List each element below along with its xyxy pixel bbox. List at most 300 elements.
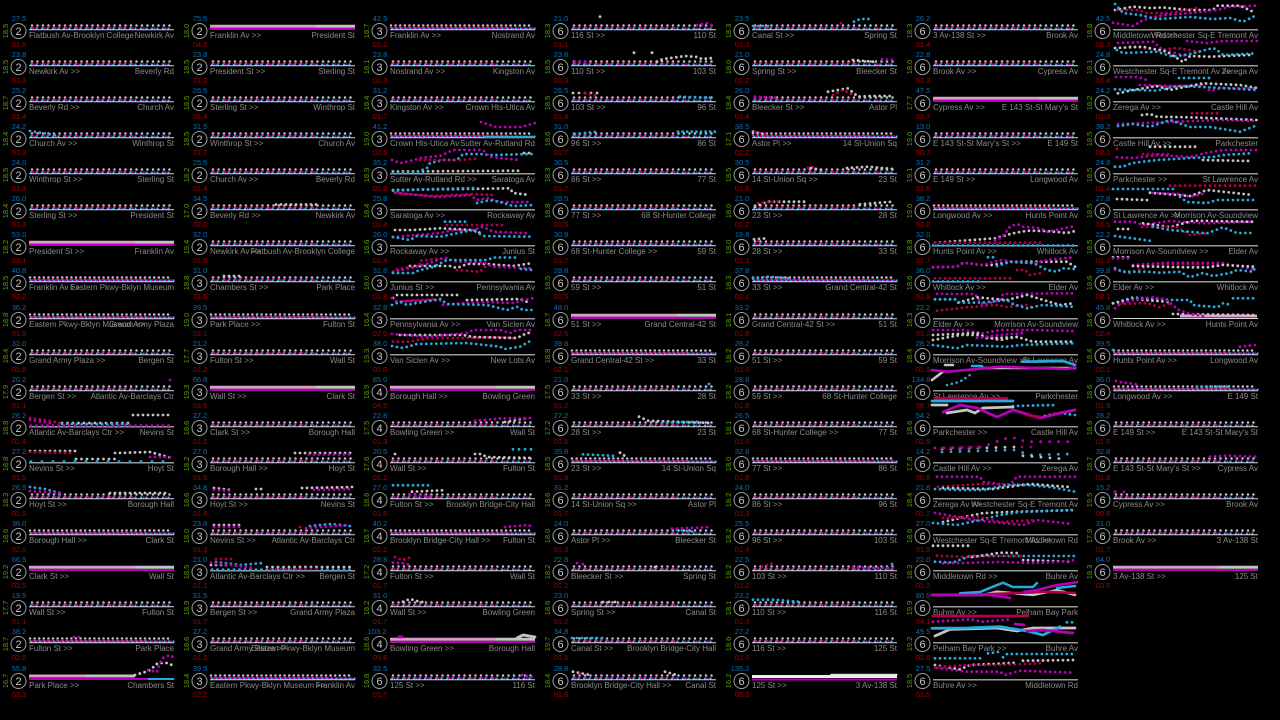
run-time dots [571, 93, 716, 102]
panel: Brooklyn Bridge-City Hall to Canal St: 01.6 [554, 690, 568, 699]
panel: Middletown Rd to Buhre Av: 18.3 [905, 565, 914, 579]
panel: Saratoga Av to Rockaway Av: 18.4 [362, 204, 371, 218]
panel: Junius St to Pennsylvania Av: Junius St >> [390, 283, 435, 292]
panel: Flatbush Av-Brooklyn College to Newkirk Av: 01.5 [12, 40, 26, 49]
panel: 68 St-Hunter College to 77 St: 01.5 [735, 437, 749, 446]
panel: 86 St to 96 St: 18.2 [724, 493, 733, 507]
panel: St Lawrence Av to Morrison Av-Soundview: Morrison Av-Soundview [1174, 211, 1258, 220]
panel: Park Place to Fulton St: Fulton St [323, 320, 356, 329]
panel: 77 St to 86 St: 86 St [878, 464, 898, 473]
panel: Bowling Green to Wall St: Wall St [510, 428, 536, 437]
run-time dots [933, 438, 1078, 463]
run-time dots [571, 494, 716, 499]
panel: 96 St to 86 St: 31.0 [554, 122, 568, 131]
run-time dots [390, 122, 535, 138]
panel: Sterling St to Winthrop St: 26.5 [193, 86, 207, 95]
panel: Brooklyn Bridge-City Hall to Fulton St: Fulton St [503, 536, 536, 545]
panel: Newkirk Av to Beverly Rd: 2 [15, 62, 22, 74]
panel: Church Av to Beverly Rd: 01.4 [193, 184, 207, 193]
panel: 59 St to 68 St-Hunter College: 59 St >> [752, 392, 783, 401]
panel: 33 St to 28 St [543, 375, 717, 410]
run-time dots [752, 422, 897, 427]
panel: Longwood Av to Hunts Point Av: Longwood Av >> [933, 211, 993, 220]
panel: Sterling St to Winthrop St: Sterling St >> [210, 103, 259, 112]
panel: Borough Hall to Bowling Green: Borough Hall >> [390, 392, 448, 401]
panel: Newkirk Av to Flatbush Av-Brooklyn College: Newkirk Av >> [210, 247, 261, 256]
panel: 23 St to 28 St: 01.2 [735, 220, 749, 229]
panel: Middletown Rd to Buhre Av [905, 546, 1078, 590]
panel: Eastern Pkwy-Bklyn Museum to Grand Army Plaza [1, 303, 175, 338]
panel: Franklin Av to Eastern Pkwy-Bklyn Museum: 2 [15, 278, 22, 290]
panel: Beverly Rd to Church Av: 18.7 [1, 96, 10, 110]
panel: Junius St to Pennsylvania Av: 3 [376, 278, 383, 290]
run-time dots [210, 62, 355, 66]
panel: 3 Av-138 St to 125 St: 03.5 [1096, 581, 1110, 590]
panel: Newkirk Av to Flatbush Av-Brooklyn College [182, 230, 356, 265]
panel: Beverly Rd to Newkirk Av: Beverly Rd >> [210, 211, 261, 220]
panel: Church Av to Winthrop St [1, 122, 175, 157]
panel: Zerega Av to Castle Hill Av [1085, 77, 1258, 121]
panel: 103 St to 110 St: 01.2 [735, 581, 749, 590]
run-time dots [1113, 186, 1258, 210]
panel: Wall St to Fulton St: 20.5 [373, 447, 387, 456]
panel: Elder Av to Morrison Av-Soundview: Morrison Av-Soundview [994, 320, 1078, 329]
panel: Saratoga Av to Rockaway Av: 25.8 [373, 194, 387, 203]
panel: E 143 St-St Mary's St to E 149 St: E 143 St-St Mary's St >> [933, 139, 1021, 148]
panel: Canal St to Brooklyn Bridge-City Hall: Canal St >> [571, 644, 614, 653]
panel: Park Place to Chambers St [1, 655, 175, 699]
panel: 86 St to 77 St: 30.5 [554, 158, 568, 167]
panel: 96 St to 86 St: 6 [557, 134, 564, 146]
panel: Astor Pl to Bleecker St: Bleecker St [675, 536, 717, 545]
panel: Longwood Av to Hunts Point Av: 02.0 [916, 220, 930, 229]
panel: Bergen St to Grand Army Plaza: 18.9 [182, 601, 191, 615]
panel: Borough Hall to Hoyt St: Hoyt St [329, 464, 356, 473]
run-time dots [933, 206, 1078, 210]
panel: Canal St to Brooklyn Bridge-City Hall: 34.8 [554, 627, 568, 636]
panel: Brook Av to 3 Av-138 St: 31.0 [1096, 519, 1110, 528]
panel: Pelham Bay Park to Buhre Av: 49.5 [916, 627, 930, 636]
panel: 23 St to 28 St: 28 St [878, 211, 898, 220]
panel: Church Av to Winthrop St: 24.2 [12, 122, 26, 131]
panel: 77 St to 86 St: 32.8 [735, 447, 749, 456]
panel: 14 St-Union Sq to 23 St: 18.5 [724, 168, 733, 182]
panel: Spring St to Canal St [543, 591, 717, 626]
panel: Winthrop St to Sterling St: 18.5 [1, 168, 10, 182]
panel: Hunts Point Av to Whitlock Av: Hunts Point Av >> [933, 247, 997, 256]
panel: Nevins St to Hoyt St [1, 447, 175, 482]
run-time dots [29, 278, 174, 282]
panel: Zerega Av to Westchester Sq-E Tremont Av: 6 [919, 495, 926, 507]
panel: Morrison Av-Soundview to Elder Av [1085, 221, 1258, 265]
panel: Grand Army Plaza to Eastern Pkwy-Bklyn Museum [182, 627, 355, 662]
panel: Grand Army Plaza to Bergen St: 01.8 [12, 365, 26, 374]
panel: 96 St to 103 St: 103 St [874, 536, 898, 545]
panel: Church Av to Beverly Rd: 25.5 [193, 158, 207, 167]
run-time dots [752, 494, 897, 499]
panel: Astor Pl to 14 St-Union Sq: 38.5 [735, 122, 749, 131]
run-time dots [571, 132, 716, 138]
panel: Atlantic Av-Barclays Ctr to Bergen St: Bergen St [319, 572, 356, 581]
panel: Flatbush Av-Brooklyn College to Newkirk Av: 27.5 [12, 14, 26, 23]
run-time dots [210, 387, 355, 390]
panel: Crown Hts-Utica Av to Sutter Av-Rutland Rd: 02.5 [373, 148, 387, 157]
panel: Whitlock Av to Hunts Point Av: 18.6 [1085, 313, 1094, 327]
panel: Pelham Bay Park to Buhre Av: Buhre Av [1046, 644, 1078, 653]
panel: Hoyt St to Nevins St: 34.8 [193, 483, 207, 492]
panel: Atlantic Av-Barclays Ctr to Bergen St: 21.0 [193, 555, 207, 564]
panel: Rockaway Av to Junius St: 01.4 [373, 256, 387, 265]
panel: Longwood Av to E 149 St: E 149 St [1227, 392, 1259, 401]
panel: Whitlock Av to Elder Av: 18.6 [905, 276, 914, 290]
panel: Longwood Av to E 149 St: Longwood Av >> [1113, 392, 1173, 401]
panel: Elder Av to Morrison Av-Soundview [905, 293, 1078, 338]
panel: Eastern Pkwy-Bklyn Museum to Franklin Av [182, 664, 355, 699]
panel: Zerega Av to Castle Hill Av: 18.2 [1085, 96, 1094, 110]
panel: 59 St to 51 St: 51 St [697, 283, 717, 292]
panel: Fulton St to Wall St: 17.7 [182, 349, 191, 363]
panel: Astor Pl to 14 St-Union Sq [724, 122, 897, 157]
run-time dots [1113, 530, 1258, 535]
panel: Bleecker St to Spring St [543, 555, 717, 590]
run-time dots [210, 204, 355, 210]
panel: 77 St to 86 St: 77 St >> [752, 464, 783, 473]
panel: Whitlock Av to Elder Av: 36.0 [916, 266, 930, 275]
panel: Castle Hill Av to Parkchester: 02.1 [1096, 148, 1110, 157]
panel: Buhre Av to Middletown Rd: 18.5 [905, 674, 914, 688]
panel: Wall St to Fulton St: Fulton St [142, 608, 175, 617]
run-time dots [571, 17, 716, 30]
panel: 110 St to 116 St: 116 St [874, 608, 898, 617]
panel: Beverly Rd to Newkirk Av: 34.5 [193, 194, 207, 203]
panel: Park Place to Chambers St: 03.3 [12, 690, 26, 699]
panel: Bergen St to Grand Army Plaza: 31.5 [193, 591, 207, 600]
panel: Parkchester to St Lawrence Av: Parkchester >> [1113, 175, 1168, 184]
run-time dots [752, 674, 897, 680]
panel: Middletown Rd to Buhre Av: 01.2 [916, 581, 930, 590]
panel: Wall St to Fulton St: 4 [376, 459, 383, 471]
panel: E 143 St-St Mary's St to E 149 St: 6 [919, 134, 926, 146]
run-time dots [390, 418, 535, 427]
panel: Pennsylvania Av to Van Siclen Av: 02.0 [373, 329, 387, 338]
run-time dots [210, 170, 355, 174]
panel: Spring St to Canal St: Canal St [685, 608, 717, 617]
run-time dots [210, 676, 355, 680]
panel: Borough Hall to Hoyt St: 01.5 [193, 473, 207, 482]
run-time dots [1113, 147, 1258, 174]
panel: Grand Army Plaza to Bergen St: 2 [15, 351, 22, 363]
panel: 116 St to 125 St: 27.2 [735, 627, 749, 636]
panel: Rockaway Av to Junius St: Junius St [502, 247, 536, 256]
panel: Rockaway Av to Junius St [362, 222, 536, 265]
panel: 116 St to 125 St: 6 [738, 639, 745, 651]
panel: Fulton St to Wall St: 21.2 [193, 339, 207, 348]
panel: Hoyt St to Borough Hall: Hoyt St >> [29, 500, 67, 509]
panel: Junius St to Pennsylvania Av: Pennsylvania Av [476, 283, 535, 292]
panel: 77 St to 68 St-Hunter College: 01.5 [554, 220, 568, 229]
panel: Whitlock Av to Elder Av: Whitlock Av >> [933, 283, 986, 292]
panel: Bowling Green to Borough Hall: Bowling Green >> [390, 644, 454, 653]
panel: Westchester Sq-E Tremont Av to Zerega Av: Zerega Av [1222, 67, 1258, 76]
panel: Newkirk Av to Beverly Rd: Newkirk Av >> [29, 67, 80, 76]
panel: 59 St to 68 St-Hunter College: 28.8 [735, 375, 749, 384]
panel: Bowling Green to Borough Hall: 05.6 [373, 653, 387, 662]
panel: 68 St-Hunter College to 77 St: 6 [738, 423, 745, 435]
panel: Hunts Point Av to Longwood Av: 18.4 [1085, 349, 1094, 363]
panel: 28 St to 23 St: 17.2 [543, 421, 552, 435]
panel: Newkirk Av to Flatbush Av-Brooklyn College: 32.0 [193, 230, 207, 239]
panel: Wall St to Bowling Green [362, 591, 535, 626]
panel: Chambers St to Park Place: Chambers St >> [210, 283, 269, 292]
panel: Newkirk Av to Flatbush Av-Brooklyn College: 19.4 [182, 240, 191, 254]
panel: Newkirk Av to Beverly Rd: 18.5 [1, 60, 10, 74]
panel: 103 St to 96 St: 18.5 [543, 96, 552, 110]
run-time dots [210, 98, 355, 102]
panel: E 143 St-St Mary's St to Cypress Av: Cypress Av [1218, 464, 1258, 473]
panel: 96 St to 86 St: 01.7 [554, 148, 568, 157]
panel: Grand Army Plaza to Bergen St: Grand Army Plaza >> [29, 356, 106, 365]
panel: Hoyt St to Borough Hall: 18.3 [1, 493, 10, 507]
panel: Spring St to Canal St: 23.0 [554, 591, 568, 600]
panel: Westchester Sq-E Tremont Av to Zerega Av: 01.4 [1096, 76, 1110, 85]
panel: Brook Av to Cypress Av: 6 [919, 62, 926, 74]
panel: Brooklyn Bridge-City Hall to Fulton St [362, 519, 536, 554]
panel: Middletown Rd to Westchester Sq-E Tremont Av: Westchester Sq-E Tremont Av [1151, 31, 1258, 40]
panel: Sterling St to President St: President St [130, 211, 175, 220]
panel: Elder Av to Morrison Av-Soundview: 01.2 [916, 329, 930, 338]
panel: Castle Hill Av to Zerega Av: 14.2 [916, 447, 930, 456]
panel: Brook Av to Cypress Av [905, 50, 1078, 85]
panel: Grand Central-42 St to 33 St: 18.8 [543, 349, 552, 363]
panel: Church Av to Winthrop St: Winthrop St [132, 139, 175, 148]
panel: Grand Central-42 St to 51 St: 6 [738, 315, 745, 327]
run-time dots [752, 386, 897, 391]
panel: Franklin Av to Eastern Pkwy-Bklyn Museum: 02.2 [12, 292, 26, 301]
panel: Cypress Av to Brook Av [1085, 483, 1258, 518]
panel: 51 St to 59 St: 01.5 [735, 365, 749, 374]
panel: 33 St to Grand Central-42 St: Grand Central-42 St [825, 283, 898, 292]
panel: Newkirk Av to Beverly Rd [1, 50, 174, 85]
panel: Bleecker St to Astor Pl: Bleecker St >> [752, 103, 805, 112]
panel: 86 St to 96 St: 96 St [878, 500, 898, 509]
panel: Junius St to Pennsylvania Av: 18.0 [362, 276, 371, 290]
panel: Longwood Av to Hunts Point Av: 6 [919, 206, 926, 218]
panel: Bleecker St to Spring St: Bleecker St >> [571, 572, 624, 581]
run-time dots [390, 449, 535, 463]
panel: Sutter Av-Rutland Rd to Saratoga Av: 18.9 [362, 168, 371, 182]
panel: Hoyt St to Borough Hall: 01.5 [12, 509, 26, 518]
run-time dots [1113, 456, 1258, 463]
panel: Spring St to Bleecker St: 21.0 [735, 50, 749, 59]
panel: Spring St to Canal St: 01.2 [554, 617, 568, 626]
panel: Wall St to Bowling Green: 31.0 [373, 591, 387, 600]
panel: 59 St to 68 St-Hunter College [724, 375, 898, 410]
run-time dots [933, 62, 1078, 66]
panel: Wall St to Fulton St: Wall St >> [390, 464, 427, 473]
panel: President St to Franklin Av [1, 230, 174, 265]
run-time dots [752, 201, 897, 210]
panel: 116 St to 125 St: 125 St [874, 644, 898, 653]
run-time dots [932, 398, 1078, 427]
run-time dots [1113, 422, 1258, 427]
panel: 125 St to 3 Av-138 St: 3 Av-138 St [856, 681, 898, 690]
panel: Parkchester to St Lawrence Av: St Lawrence Av [1203, 175, 1258, 184]
panel: Sterling St to President St [1, 194, 175, 229]
panel: Eastern Pkwy-Bklyn Museum to Franklin Av: Franklin Av [316, 681, 355, 690]
panel: 3 Av-138 St to Brook Av: 3 Av-138 St >> [933, 31, 986, 40]
panel: Rockaway Av to Junius St: 26.0 [373, 230, 387, 239]
panel: Fulton St to Park Place: Park Place [135, 644, 175, 653]
panel: Grand Army Plaza to Eastern Pkwy-Bklyn Museum: Eastern Pkwy-Bklyn Museum [251, 644, 355, 653]
panel: E 143 St-St Mary's St to Cypress Av [1085, 447, 1258, 482]
run-time dots [571, 170, 716, 174]
panel: 68 St-Hunter College to 77 St: 77 St [878, 428, 898, 437]
panel: 3 Av-138 St to Brook Av: 26.2 [916, 14, 930, 23]
panel: Morrison Av-Soundview to St Lawrence Av: 01.5 [916, 365, 930, 374]
panel: Wall St to Fulton St: 17.7 [1, 601, 10, 615]
panel: 68 St-Hunter College to 59 St: 6 [557, 242, 564, 254]
panel: Clark St to Borough Hall: 3 [196, 423, 203, 435]
panel: Park Place to Chambers St: 55.8 [12, 664, 26, 673]
panel: 116 St to 110 St: 01.1 [554, 40, 568, 49]
panel: E 149 St to Longwood Av [905, 158, 1078, 193]
run-time dots [210, 453, 355, 463]
panel: Grand Central-42 St to 51 St: Grand Central-42 St >> [752, 320, 835, 329]
panel: Brook Av to 3 Av-138 St [1085, 519, 1259, 554]
panel: Church Av to Beverly Rd: Church Av >> [210, 175, 259, 184]
panel: 86 St to 96 St: 01.3 [735, 509, 749, 518]
panel: Middletown Rd to Buhre Av: 6 [919, 567, 926, 579]
panel: Atlantic Av-Barclays Ctr to Nevins St: 26.2 [12, 411, 26, 420]
run-time dots [752, 563, 897, 571]
panel: Fulton St to Wall St: Wall St [330, 356, 356, 365]
run-time dots [390, 150, 535, 174]
panel: Franklin Av to Nostrand Av: 42.5 [373, 14, 387, 23]
panel: President St to Sterling St: 2 [196, 62, 203, 74]
panel: Atlantic Av-Barclays Ctr to Bergen St: Atlantic Av-Barclays Ctr >> [210, 572, 305, 581]
run-time dots [752, 530, 897, 535]
panel: Wall St to Clark St: 66.8 [193, 375, 207, 384]
panel: Wall St to Clark St: 3 [196, 387, 203, 399]
panel: 28 St to 33 St: 01.1 [735, 256, 749, 265]
panel: E 143 St-St Mary's St to E 149 St [905, 122, 1079, 157]
panel: St Lawrence Av to Morrison Av-Soundview: 18.5 [1085, 204, 1094, 218]
run-time dots [390, 387, 535, 390]
panel: 14 St-Union Sq to 23 St: 14 St-Union Sq >> [752, 175, 818, 184]
panel: Atlantic Av-Barclays Ctr to Nevins St [1, 411, 175, 446]
panel: Fulton St to Park Place: Fulton St >> [29, 644, 73, 653]
panel: 3 Av-138 St to Brook Av: Brook Av [1046, 31, 1078, 40]
panel: Zerega Av to Westchester Sq-E Tremont Av: 01.2 [916, 509, 930, 518]
panel: 86 St to 77 St [543, 158, 717, 193]
panel: Zerega Av to Westchester Sq-E Tremont Av: Westchester Sq-E Tremont Av [971, 500, 1078, 509]
panel: Borough Hall to Hoyt St: 18.2 [182, 457, 191, 471]
panel: Beverly Rd to Church Av: Church Av [137, 103, 174, 112]
panel: 103 St to 110 St: 6 [738, 567, 745, 579]
run-time dots [752, 132, 897, 138]
panel: 110 St to 116 St: 6 [738, 603, 745, 615]
panel: Borough Hall to Clark St [1, 519, 175, 554]
panel: 23 St to 14 St-Union Sq: 23 St >> [571, 464, 602, 473]
panel: Pennsylvania Av to Van Siclen Av [362, 295, 535, 338]
panel: 110 St to 116 St: 110 St >> [752, 608, 786, 617]
panel: St Lawrence Av to Morrison Av-Soundview: St Lawrence Av >> [1113, 211, 1180, 220]
panel: Grand Central-42 St to 33 St: 33 St [697, 356, 717, 365]
panel: Westchester Sq-E Tremont Av to Middletown Rd: 6 [919, 531, 926, 543]
panel: 33 St to Grand Central-42 St: 37.8 [735, 266, 749, 275]
panel: Sterling St to Winthrop St [182, 86, 356, 121]
panel: 125 St to 116 St: 32.5 [373, 664, 387, 673]
panel: Hunts Point Av to Whitlock Av: 6 [919, 242, 926, 254]
panel: Spring St to Bleecker St: 6 [738, 62, 745, 74]
panel: E 143 St-St Mary's St to E 149 St: 19.0 [905, 132, 914, 146]
panel: St Lawrence Av to Parkchester: 134.8 [912, 375, 930, 384]
panel: Nevins St to Atlantic Av-Barclays Ctr: 18.0 [182, 529, 191, 543]
panel: 14 St-Union Sq to Astor Pl: 14 St-Union Sq >> [571, 500, 637, 509]
panel: Nostrand Av to Kingston Av: 3 [376, 62, 383, 74]
panel: E 149 St to E 143 St-St Mary's St: E 143 St-St Mary's St [1182, 428, 1259, 437]
panel: Nostrand Av to Kingston Av: 23.8 [373, 50, 387, 59]
panel: Brooklyn Bridge-City Hall to Canal St: Canal St [685, 681, 717, 690]
panel: Flatbush Av-Brooklyn College to Newkirk Av [1, 14, 174, 49]
panel: Whitlock Av to Elder Av [905, 257, 1078, 301]
panel: Morrison Av-Soundview to St Lawrence Av: 28.2 [916, 339, 930, 348]
panel: E 149 St to E 143 St-St Mary's St [1085, 411, 1259, 446]
panel: Wall St to Bowling Green: Wall St >> [390, 608, 427, 617]
panel: Bleecker St to Astor Pl: Astor Pl [869, 103, 897, 112]
panel: Spring St to Bleecker St: 01.2 [735, 76, 749, 85]
panel: Winthrop St to Church Av: Winthrop St >> [210, 139, 264, 148]
panel: Franklin Av to President St: 18.0 [182, 24, 191, 38]
run-time dots [933, 293, 1078, 319]
panel: Brook Av to 3 Av-138 St: Brook Av >> [1113, 536, 1157, 545]
panel: 125 St to 3 Av-138 St: 135.2 [731, 664, 749, 673]
panel: Flatbush Av-Brooklyn College to Newkirk Av: Newkirk Av [135, 31, 174, 40]
run-time dots [933, 510, 1078, 535]
panel: Clark St to Wall St [1, 555, 175, 590]
panel: 110 St to 103 St [543, 50, 717, 85]
panel: Brooklyn Bridge-City Hall to Fulton St: 18.7 [362, 529, 371, 543]
panel: 103 St to 110 St [724, 555, 898, 590]
panel: Beverly Rd to Newkirk Av: 02.0 [193, 220, 207, 229]
panel: 51 St to 59 St: 6 [738, 351, 745, 363]
panel: Franklin Av to Nostrand Av: 02.2 [373, 40, 387, 49]
panel: Winthrop St to Church Av: 2 [196, 134, 203, 146]
panel: 103 St to 110 St: 18.2 [724, 565, 733, 579]
panel: Saratoga Av to Rockaway Av: 01.4 [373, 220, 387, 229]
panel: Bergen St to Atlantic Av-Barclays Ctr [1, 375, 174, 410]
panel: Westchester Sq-E Tremont Av to Middletown Rd: 01.5 [916, 545, 930, 554]
panel: 77 St to 86 St: 6 [738, 459, 745, 471]
panel: Brook Av to Cypress Av: Brook Av >> [933, 67, 977, 76]
panel: 33 St to 28 St: 21.0 [554, 375, 568, 384]
panel: Canal St to Spring St: Spring St [864, 31, 898, 40]
panel: 28 St to 23 St: 6 [557, 423, 564, 435]
panel: Eastern Pkwy-Bklyn Museum to Grand Army Plaza: 36.2 [12, 303, 26, 312]
panel: Zerega Av to Westchester Sq-E Tremont Av [905, 477, 1078, 518]
panel: Nevins St to Hoyt St: 18.8 [1, 457, 10, 471]
run-time dots [933, 26, 1078, 30]
panel: Fulton St to Brooklyn Bridge-City Hall: 27.0 [373, 483, 387, 492]
run-time dots [933, 170, 1078, 174]
panel: Wall St to Fulton St: 19.5 [12, 591, 26, 600]
panel: Park Place to Fulton St: Park Place >> [210, 320, 261, 329]
panel: Hoyt St to Borough Hall: 26.5 [12, 483, 26, 492]
panel: Winthrop St to Church Av: 31.5 [193, 122, 207, 131]
run-time dots [210, 314, 355, 319]
panel: Van Siclen Av to New Lots Av: 38.0 [373, 339, 387, 348]
panel: Grand Central-42 St to 33 St: 02.1 [554, 365, 568, 374]
